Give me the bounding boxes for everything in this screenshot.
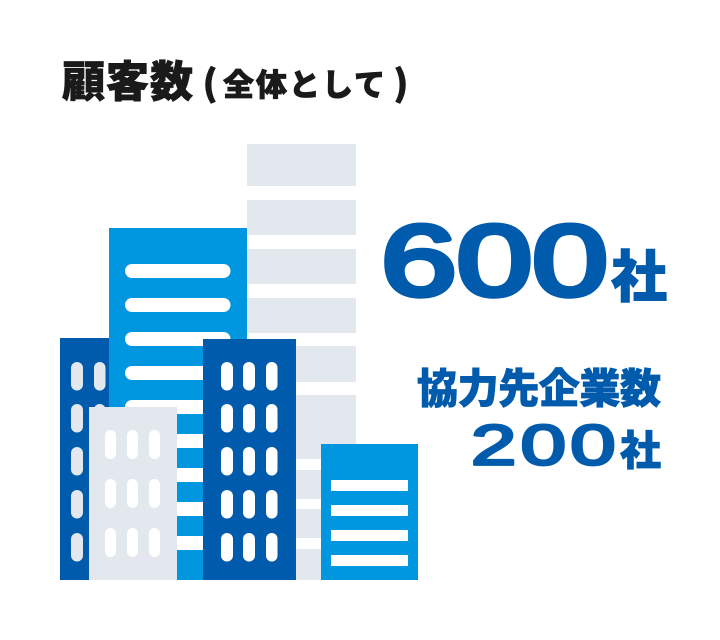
- title: ): [394, 56, 408, 107]
- building: tall grey tower: [247, 144, 356, 580]
- building: centre light blue: [109, 228, 247, 580]
- building: centre dark blue: [203, 339, 296, 580]
- label: partner companies: 協力先企業数: [417, 355, 661, 415]
- title: (: [203, 56, 217, 107]
- title: 顧客数: [62, 48, 194, 110]
- value: 200 companies: 200: [471, 413, 620, 477]
- statistic: customers 600 companies: 社: [611, 233, 667, 314]
- title: [62, 48, 408, 110]
- illustration: buildings: [60, 144, 418, 580]
- building: right light blue: [321, 444, 418, 580]
- building: front grey: [89, 407, 177, 580]
- building: left dark blue: [60, 338, 120, 580]
- title: 全体として: [223, 60, 387, 105]
- value: 200 companies: 社: [620, 417, 661, 477]
- statistic: customers 600 companies: 600: [381, 205, 608, 317]
- statistic: partner companies 200: [417, 355, 661, 477]
